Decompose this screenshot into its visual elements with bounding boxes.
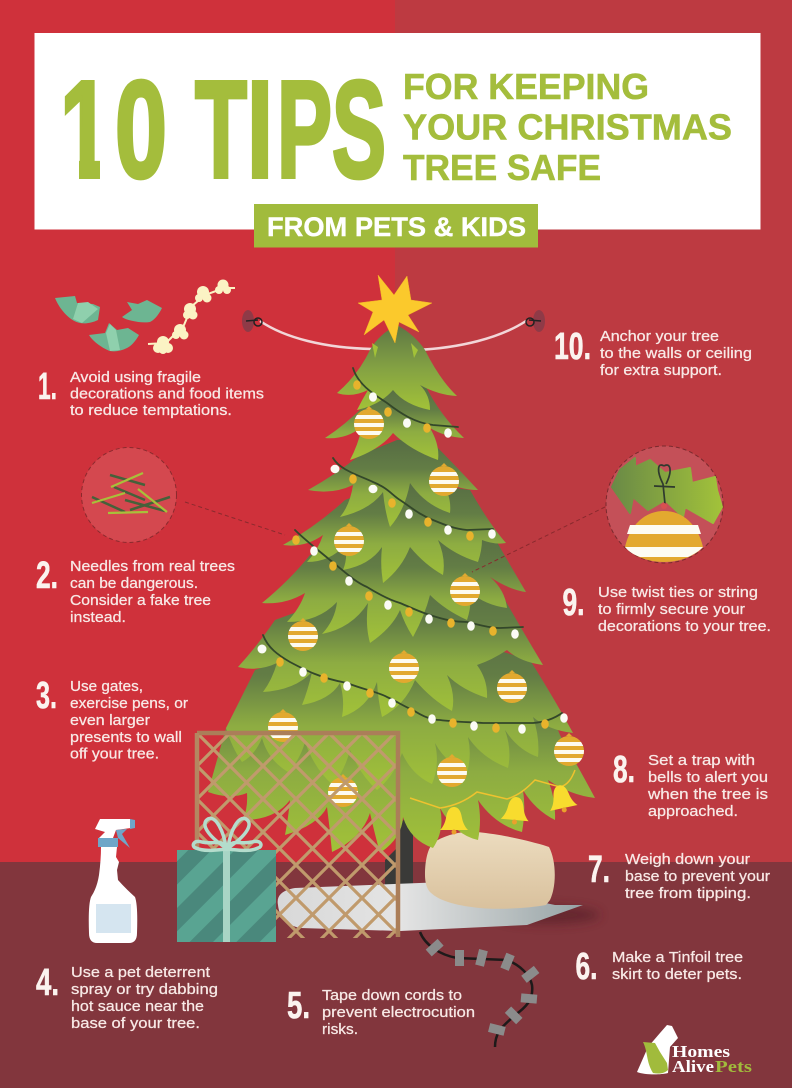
cord with tape — [420, 932, 539, 1047]
callout: needles circle — [82, 448, 285, 542]
tip 10 — [554, 326, 752, 379]
tip 10: Anchor your tree — [600, 329, 719, 345]
tip 3 — [36, 675, 188, 762]
tip 4 — [36, 962, 218, 1032]
striped baubles — [268, 406, 584, 807]
callout: bauble tied with string — [472, 446, 723, 572]
tip 6: 6. — [576, 946, 598, 988]
tip 5: 5. — [287, 985, 310, 1027]
icon: popcorn string — [148, 280, 235, 354]
logo: Homes Alive Pets: Alive — [672, 1057, 714, 1076]
tip 10: 10. — [554, 326, 591, 368]
subtitle — [403, 66, 732, 188]
wire tie ticks — [372, 343, 418, 358]
icon: broken green ornaments — [55, 296, 162, 351]
tip 4: spray or try dabbing — [71, 982, 218, 998]
subtitle: TREE SAFE — [403, 147, 601, 188]
tip 1 — [38, 366, 264, 419]
tip 1: to reduce temptations. — [70, 403, 232, 419]
tip 5: risks. — [322, 1022, 358, 1038]
logo: Homes Alive Pets — [637, 1025, 752, 1076]
tip 9: decorations to your tree. — [598, 619, 771, 635]
spray bottle — [89, 819, 137, 943]
tip 6: skirt to deter pets. — [612, 967, 742, 983]
logo: Homes Alive Pets: Pets — [715, 1057, 752, 1076]
tip 10: for extra support. — [600, 363, 722, 379]
tip 5: Tape down cords to — [322, 988, 462, 1004]
tip 6 — [576, 946, 743, 988]
tip 4: hot sauce near the — [71, 999, 204, 1015]
tip 9: Use twist ties or string — [598, 585, 758, 601]
tip 1: Avoid using fragile — [70, 370, 201, 386]
bell trap garland — [410, 770, 578, 834]
tree tier 4 — [283, 480, 506, 583]
tip 8 — [613, 749, 768, 820]
tree tier 6 — [238, 575, 543, 717]
tip 9 — [562, 582, 771, 635]
tip 3: presents to wall — [70, 730, 182, 746]
title: 10 TIPS: S — [332, 53, 386, 207]
tip 7: tree from tipping. — [625, 886, 751, 902]
tree tier 1 — [337, 325, 457, 410]
tip 6: Make a Tinfoil tree — [612, 950, 743, 966]
tip 10: to the walls or ceiling — [600, 346, 752, 362]
tip 5: prevent electrocution — [322, 1005, 475, 1021]
christmas tree — [208, 325, 595, 853]
icon: left wall anchor and wire — [242, 310, 372, 349]
bulbs — [258, 380, 568, 734]
tip 2: Needles from real trees — [70, 559, 235, 575]
tip 2: 2. — [36, 555, 58, 597]
tip 3: Use gates, — [70, 679, 143, 695]
star topper — [358, 275, 432, 343]
tip 9: to firmly secure your — [598, 602, 745, 618]
tip 5 — [287, 985, 475, 1038]
tinfoil tree skirt — [278, 882, 600, 931]
tip 2: Consider a fake tree — [70, 593, 211, 609]
tip 2 — [36, 555, 235, 626]
tip 8: Set a trap with — [648, 753, 755, 769]
tree tier 7 — [226, 620, 573, 790]
title: 10 TIPS: I — [247, 53, 273, 207]
title: 10 TIPS: 0 — [115, 53, 167, 207]
tip 4: base of your tree. — [71, 1016, 200, 1032]
gift box — [177, 818, 276, 942]
logo: Homes Alive Pets: Homes — [672, 1042, 730, 1061]
tip 8: when the tree is — [647, 787, 768, 803]
tip 4: 4. — [36, 962, 59, 1004]
tip 3: 3. — [36, 675, 57, 717]
tip 8: bells to alert you — [648, 770, 768, 786]
tip 4: Use a pet deterrent — [71, 965, 210, 981]
tip 7 — [588, 849, 770, 902]
tip 7: Weigh down your — [625, 852, 750, 868]
tree tier 3 — [308, 440, 478, 527]
tip 7: base to prevent your — [625, 869, 770, 885]
tip 3: exercise pens, or — [70, 696, 188, 712]
light string garlands — [263, 368, 562, 723]
tip 7: 7. — [588, 849, 610, 891]
lattice gate — [197, 733, 398, 938]
tree tier 8 — [208, 640, 595, 853]
subtitle: YOUR CHRISTMAS — [403, 106, 732, 148]
tip 2: can be dangerous. — [70, 576, 198, 592]
tip 9: 9. — [562, 582, 584, 624]
title: 10 TIPS: 1 — [60, 53, 110, 207]
subtitle: FOR KEEPING — [403, 66, 649, 107]
tip 8: approached. — [648, 804, 738, 820]
tree tier 2 — [325, 385, 464, 460]
icon: right wall anchor and wire — [416, 310, 545, 350]
tip 1: 1. — [38, 366, 57, 408]
tip 1: decorations and food items — [70, 386, 264, 402]
title: 10 TIPS — [64, 78, 384, 180]
tree tier 5 — [262, 530, 526, 643]
tip 3: off your tree. — [70, 746, 159, 762]
tip 8: 8. — [613, 749, 635, 791]
tip 2: instead. — [70, 610, 126, 626]
title: 10 TIPS: T — [195, 53, 247, 207]
tip 3: even larger — [70, 713, 150, 729]
title: 10 TIPS: P — [277, 53, 332, 207]
tree trunk — [385, 815, 413, 886]
sack weight — [425, 832, 555, 909]
banner: from pets and kids: FROM PETS & KIDS — [267, 212, 526, 242]
banner: from pets and kids — [254, 204, 538, 248]
header panel — [34, 33, 760, 230]
